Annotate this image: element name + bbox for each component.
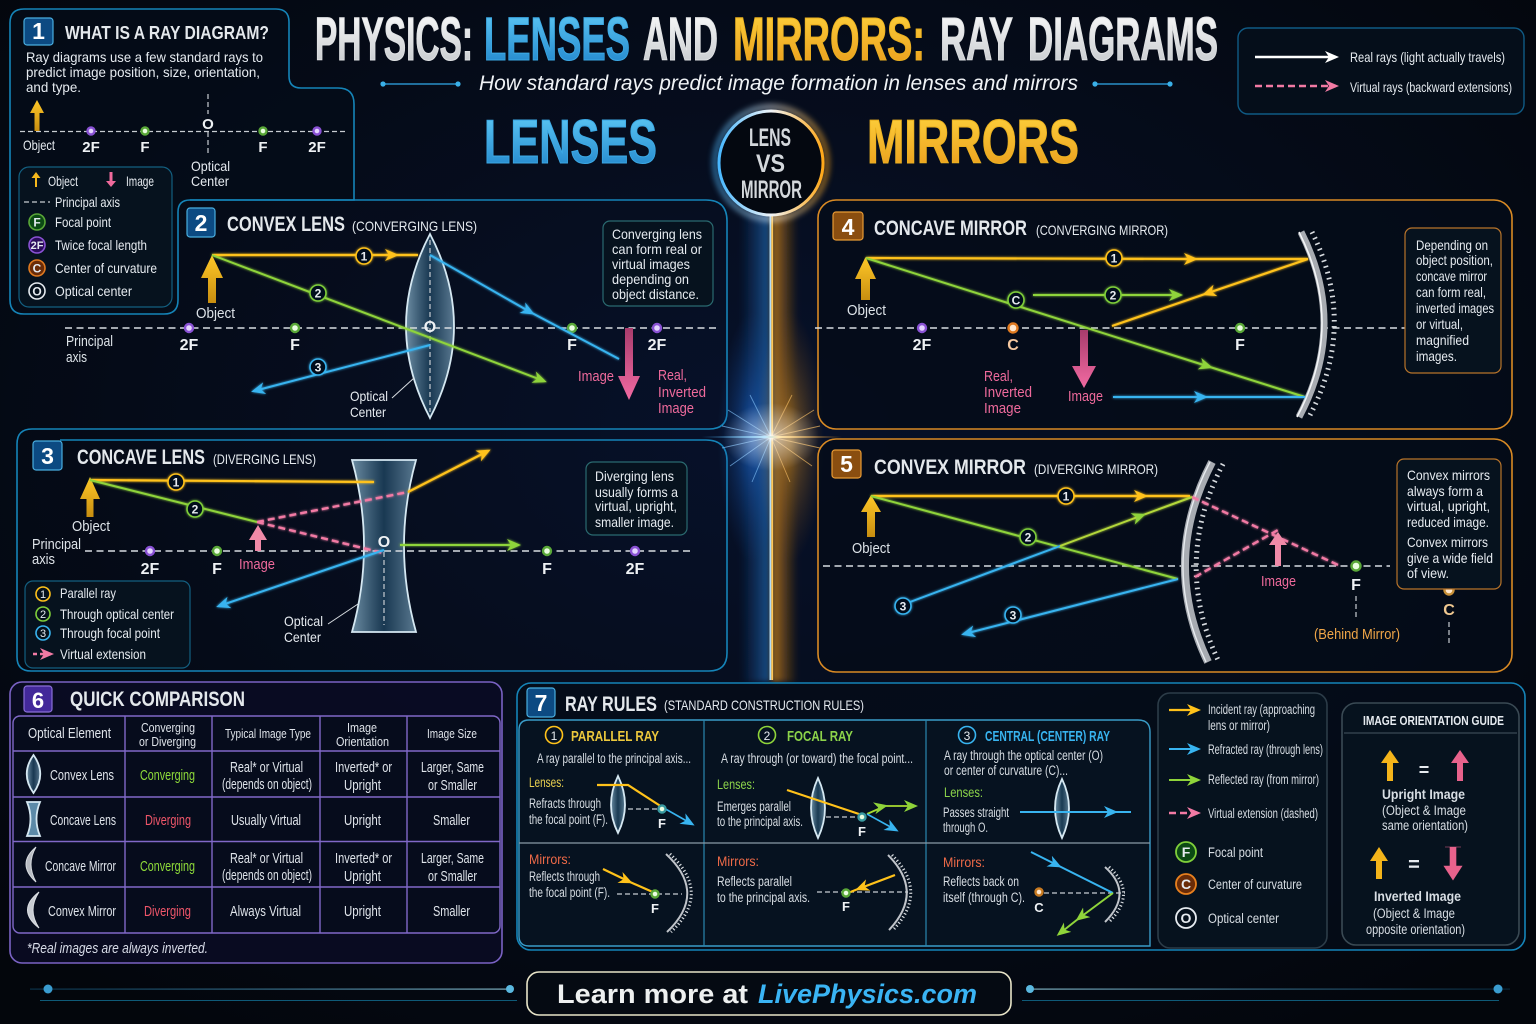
rays: 2 — [1110, 288, 1117, 302]
row: convex mirror: Smaller — [433, 904, 470, 920]
panel 5: convex mirror — [818, 439, 1512, 672]
principal axis and points: (Behind Mirror) — [1314, 626, 1400, 643]
row: convex lens: Real* or Virtual — [230, 760, 303, 776]
badge 3 — [33, 441, 62, 470]
rays: 3 — [315, 360, 322, 374]
rule 1: parallel ray: F — [651, 901, 659, 916]
rule 1: parallel ray: Lenses: — [529, 775, 564, 790]
image orientation guide: (Object & Image — [1373, 906, 1455, 921]
object arrow: Object — [847, 302, 887, 319]
ray and point legend: F — [1182, 844, 1191, 860]
table header row: Image — [347, 720, 377, 735]
row: concave lens: Usually Virtual — [231, 813, 301, 829]
rule 1: parallel ray: Refracts through — [529, 796, 601, 811]
panel 2 heading: CONVEX LENS — [227, 213, 345, 236]
ray and point legend: Focal point — [1208, 845, 1263, 860]
ray and point legend: C — [1181, 876, 1191, 892]
table header row — [28, 720, 477, 749]
image arrow — [1261, 532, 1296, 590]
rule 2: focal ray: F — [858, 824, 866, 839]
rays: 3 — [900, 600, 907, 614]
rule 3: central ray: Reflects back on — [943, 874, 1019, 889]
principal axis and focal points: 2F — [648, 337, 667, 354]
badge 6: 6 — [32, 688, 44, 713]
principal axis and points: 2F — [913, 337, 932, 354]
principal axis and focal points: F — [290, 337, 300, 354]
panel 2: convex lens — [17, 200, 727, 444]
badge 7: 7 — [535, 690, 547, 716]
note: converging lens: depending on — [612, 271, 689, 287]
note: diverging lens — [586, 462, 687, 535]
image arrow: Inverted — [984, 384, 1032, 401]
badge 7 — [527, 688, 555, 717]
image orientation guide: same orientation) — [1382, 818, 1468, 833]
ray and point legend: Reflected ray (from mirror) — [1208, 772, 1319, 787]
title: DIAGRAMS — [1028, 5, 1218, 73]
panel 3 heading: (DIVERGING LENS) — [213, 451, 316, 467]
note: diverging lens: usually forms a — [595, 484, 678, 500]
badge 2 — [187, 208, 215, 237]
object arrow: Object — [196, 305, 236, 322]
rule 3: central ray: itself (through C). — [943, 890, 1025, 905]
note: diverging lens: Diverging lens — [595, 468, 674, 484]
note: concave mirror: concave mirror — [1416, 268, 1487, 284]
image arrow — [984, 330, 1103, 417]
table header row: Image Size — [427, 726, 477, 741]
image arrow: Image — [1068, 388, 1103, 405]
intro axis diagram: F — [258, 139, 268, 156]
image arrow — [578, 328, 706, 417]
title: MIRRORS: — [733, 5, 925, 73]
heading: lenses: LENSES — [484, 108, 657, 177]
panel 1 description: Ray diagrams use a few standard rays to — [26, 49, 263, 65]
row: convex lens: Inverted* or — [335, 760, 392, 776]
badge 4 — [833, 212, 863, 240]
note: diverging lens: virtual, upright, — [595, 498, 677, 514]
row: concave lens: Diverging — [145, 813, 191, 829]
panel 3 heading: CONCAVE LENS — [77, 446, 205, 469]
panel 4 heading: (CONVERGING MIRROR) — [1036, 222, 1168, 238]
ray legend: 2 — [40, 609, 46, 621]
row: convex lens: (depends on object) — [222, 777, 312, 793]
symbol legend: F — [33, 216, 41, 230]
row: convex mirror: Convex Mirror — [48, 904, 116, 920]
note: converging lens: object distance. — [612, 286, 699, 302]
note: concave mirror: object position, — [1416, 252, 1493, 268]
principal axis and focal points: axis — [32, 551, 55, 568]
row: convex lens — [27, 755, 484, 794]
panel 1 description — [26, 49, 263, 95]
convex lens shape — [406, 234, 454, 418]
symbol legend: Optical center — [55, 283, 132, 299]
principal axis and focal points: axis — [66, 349, 87, 366]
badge 2: 2 — [195, 210, 207, 236]
ray legend: 3 — [40, 628, 46, 640]
ray and point legend: Virtual extension (dashed) — [1208, 806, 1318, 821]
rule 2: focal ray: to the principal axis. — [717, 814, 803, 829]
ray and point legend: Optical center — [1208, 911, 1279, 926]
row: concave mirror: Converging — [140, 859, 195, 875]
panel 3: concave lens — [17, 440, 727, 671]
footer: learn more link — [30, 972, 1510, 1015]
row: concave lens: Concave Lens — [50, 813, 116, 829]
ray legend: Through focal point — [60, 625, 160, 641]
badge 5 — [832, 450, 861, 478]
image orientation guide — [1342, 703, 1519, 945]
panel 4 heading — [874, 217, 1168, 240]
object arrow: Object — [852, 540, 891, 557]
rules grid — [519, 720, 1150, 946]
rule 3: central ray: 3 — [964, 729, 971, 743]
footer: learn more link: Learn more at — [557, 979, 748, 1009]
comparison table grid — [13, 716, 500, 933]
principal axis and focal points: Principal — [66, 333, 113, 350]
panel 4: concave mirror — [815, 200, 1512, 429]
rule 1: parallel ray: Mirrors: — [529, 852, 571, 867]
image orientation guide: = — [1419, 760, 1429, 780]
note: converging lens — [603, 221, 713, 306]
badge: lens vs mirror: MIRROR — [741, 176, 802, 204]
convex mirror shape — [1183, 462, 1223, 662]
title: LENSES — [484, 5, 630, 73]
row: convex lens: Converging — [140, 768, 195, 784]
symbol legend: Principal axis — [55, 194, 120, 210]
panel 5 heading: (DIVERGING MIRROR) — [1034, 461, 1158, 477]
rule 3: central ray: Mirrors: — [943, 855, 985, 870]
table footnote: *Real images are always inverted. — [27, 940, 208, 957]
note: convex mirror: Convex mirrors — [1407, 467, 1490, 483]
note: diverging lens: smaller image. — [595, 514, 674, 530]
rule 2: focal ray: 2 — [764, 729, 771, 743]
rays: 2 — [192, 502, 199, 516]
rule 3: central ray: Passes straight — [943, 805, 1009, 820]
panel 4 heading: CONCAVE MIRROR — [874, 217, 1027, 240]
note: convex mirror — [1397, 459, 1501, 589]
concave mirror shape — [1297, 232, 1334, 417]
row: convex lens: Convex Lens — [50, 768, 114, 784]
badge 1 — [24, 18, 53, 45]
row: concave mirror: Real* or Virtual — [230, 851, 303, 867]
rule 2: focal ray: Reflects parallel — [717, 874, 792, 889]
principal axis and focal points: F — [542, 561, 552, 578]
principal axis and points: F — [1351, 577, 1361, 594]
symbol legend: 2F — [31, 240, 44, 252]
rule 2: focal ray: Emerges parallel — [717, 799, 791, 814]
principal axis and focal points: F — [567, 337, 577, 354]
image arrow: Image — [239, 556, 275, 573]
principal axis and focal points: 2F — [180, 337, 199, 354]
rays: 1 — [361, 250, 368, 264]
rule 3: central ray: Lenses: — [944, 785, 983, 800]
note: convex mirror: give a wide field — [1407, 550, 1493, 566]
panel 5 heading: CONVEX MIRROR — [874, 456, 1026, 479]
rays — [871, 488, 1338, 634]
row: convex lens: Upright — [344, 778, 381, 794]
panel 2 heading: (CONVERGING LENS) — [352, 218, 477, 234]
optical center label — [350, 378, 414, 420]
note: converging lens: can form real or — [612, 241, 702, 257]
intro axis diagram: Object — [23, 137, 55, 153]
row: convex mirror — [28, 892, 470, 928]
rule 2: focal ray: FOCAL RAY — [787, 728, 853, 745]
row: convex lens: or Smaller — [428, 778, 477, 794]
symbol legend: O — [32, 284, 42, 298]
image orientation guide: Inverted Image — [1374, 888, 1461, 904]
panel 6: quick comparison — [10, 682, 502, 963]
intro axis diagram: 2F — [82, 139, 100, 156]
intro axis diagram: 2F — [308, 139, 326, 156]
note: concave mirror — [1405, 228, 1501, 373]
ray legend: Parallel ray — [60, 585, 116, 601]
note: concave mirror: magnified — [1416, 332, 1469, 348]
rays: C — [1012, 294, 1021, 308]
rule 2: focal ray: to the principal axis. — [717, 890, 810, 905]
badge 4: 4 — [842, 214, 855, 240]
note: converging lens: Converging lens — [612, 226, 702, 242]
symbol legend: Center of curvature — [55, 260, 157, 276]
optical center label: Optical — [350, 388, 388, 404]
rule 1: parallel ray: the focal point (F). — [529, 885, 610, 900]
badge: lens vs mirror — [715, 107, 827, 219]
badge 5: 5 — [840, 451, 853, 477]
rule 3: central ray: or center of curvature (C)... — [944, 763, 1068, 778]
table header row: or Diverging — [139, 734, 196, 749]
principal axis and points: F — [1235, 337, 1245, 354]
optical center label: Center — [350, 404, 386, 420]
optical center label: Optical — [284, 613, 323, 629]
title: RAY — [940, 5, 1013, 73]
rays: 1 — [173, 476, 180, 490]
ray legend: 1 — [40, 589, 46, 601]
rule 3: central ray: CENTRAL (CENTER) RAY — [985, 728, 1110, 745]
row: concave mirror — [26, 847, 484, 885]
panel 7 heading — [565, 693, 864, 716]
image arrow: Real, — [658, 367, 687, 384]
image arrow: Image — [578, 368, 614, 385]
rule 2: focal ray: Mirrors: — [717, 854, 759, 869]
row: concave mirror: Inverted* or — [335, 851, 392, 867]
badge 6 — [24, 686, 52, 713]
heading: mirrors: MIRRORS — [867, 108, 1079, 177]
rays: 2 — [1025, 530, 1032, 544]
principal axis and focal points: Principal — [32, 536, 81, 553]
image arrow: Inverted — [658, 384, 706, 401]
note: concave mirror: Depending on — [1416, 237, 1488, 253]
rays — [90, 451, 518, 606]
ray legend: Virtual extension — [60, 646, 146, 662]
ray and point legend: Refracted ray (through lens) — [1208, 742, 1323, 757]
ray and point legend: Incident ray (approaching — [1208, 702, 1315, 717]
symbol legend — [19, 167, 172, 307]
row: convex mirror: Diverging — [144, 904, 191, 920]
note: convex mirror: Convex mirrors — [1407, 534, 1488, 550]
image orientation guide: Upright Image — [1382, 786, 1465, 802]
symbol legend: C — [33, 262, 42, 276]
row: concave mirror: Concave Mirror — [45, 859, 116, 875]
principal axis and points — [823, 562, 1455, 645]
principal axis and points: C — [1007, 337, 1019, 354]
rays: 1 — [1063, 490, 1070, 504]
note: converging lens: virtual images — [612, 256, 690, 272]
image orientation guide: = — [1408, 854, 1420, 876]
row: convex lens: Larger, Same — [421, 760, 484, 776]
row: convex mirror: Upright — [344, 904, 381, 920]
panel 1 description: and type. — [26, 79, 81, 95]
panel 3 heading — [77, 446, 316, 469]
panel 6 heading: QUICK COMPARISON — [70, 688, 245, 711]
principal axis and focal points: 2F — [141, 561, 160, 578]
rule 2: focal ray: F — [842, 899, 850, 914]
panel 5 heading — [874, 456, 1158, 479]
principal axis and focal points: 2F — [626, 561, 645, 578]
badge 1: 1 — [32, 18, 45, 44]
image orientation guide: opposite orientation) — [1366, 922, 1465, 937]
table header row: Converging — [141, 720, 195, 735]
row: concave mirror: or Smaller — [428, 869, 477, 885]
ray and point legend: Center of curvature — [1208, 877, 1302, 892]
principal axis and focal points: F — [212, 561, 222, 578]
footer: learn more link: LivePhysics.com — [758, 979, 977, 1009]
table header row: Orientation — [336, 734, 389, 749]
panel 2 heading — [227, 213, 477, 236]
image arrow: Image — [658, 400, 694, 417]
principal axis and focal points — [65, 240, 720, 412]
rays — [866, 250, 1308, 397]
rule 3: central ray: A ray through the optical center (O) — [944, 748, 1103, 763]
title: AND — [643, 5, 718, 73]
object arrow: Object — [72, 518, 111, 535]
ray legend: Through optical center — [60, 606, 174, 622]
rule 2: focal ray: Lenses: — [717, 777, 755, 792]
rays: 2 — [315, 286, 322, 300]
ray legend — [25, 581, 190, 668]
rays: 3 — [1010, 608, 1017, 622]
row: concave lens: Upright — [344, 813, 381, 829]
image arrow — [239, 525, 275, 573]
panel 1: what is a ray diagram — [10, 9, 354, 314]
central beam divider — [702, 212, 842, 682]
title — [315, 5, 1218, 73]
intro axis diagram — [20, 94, 348, 189]
principal axis and focal points — [32, 536, 690, 625]
optical center mark: O — [424, 319, 436, 336]
rule 3: central ray — [943, 726, 1131, 934]
concave lens shape — [352, 460, 416, 632]
object arrow — [196, 255, 236, 322]
intro axis diagram: F — [140, 139, 150, 156]
symbol legend: Twice focal length — [55, 237, 147, 253]
ray and point legend: O — [1181, 910, 1192, 926]
note: convex mirror: reduced image. — [1407, 514, 1489, 530]
principal axis and points — [815, 324, 1405, 354]
rule 1: parallel ray: PARALLEL RAY — [571, 728, 659, 745]
image arrow: Image — [984, 400, 1021, 417]
rule 2: focal ray: A ray through (or toward) the focal point... — [721, 751, 913, 766]
rule 3: central ray: C — [1034, 900, 1044, 915]
ray and point legend: lens or mirror) — [1208, 718, 1270, 733]
image arrow: Real, — [984, 368, 1013, 385]
rule 1: parallel ray: A ray parallel to the principal axis... — [537, 751, 691, 766]
badge 3: 3 — [41, 443, 54, 469]
row: concave lens — [27, 802, 470, 836]
note: concave mirror: can form real, — [1416, 284, 1486, 300]
row: concave lens: Smaller — [433, 813, 470, 829]
panel 1 heading: WHAT IS A RAY DIAGRAM? — [65, 23, 269, 43]
rule 1: parallel ray: the focal point (F). — [529, 812, 608, 827]
rule 1: parallel ray — [529, 726, 692, 932]
principal axis and points: C — [1443, 602, 1455, 619]
title: PHYSICS: — [315, 5, 473, 73]
row: concave mirror: Upright — [344, 869, 381, 885]
ray and point legend — [1158, 693, 1327, 948]
rule 1: parallel ray: 1 — [551, 729, 558, 743]
intro axis diagram: O — [202, 116, 214, 133]
object arrow — [852, 495, 891, 557]
table header row: Optical Element — [28, 726, 111, 742]
image orientation guide: (Object & Image — [1382, 803, 1466, 818]
symbol legend: Focal point — [55, 214, 111, 230]
object arrow — [72, 477, 111, 535]
rule 1: parallel ray: F — [658, 816, 666, 831]
note: convex mirror: always form a — [1407, 483, 1483, 499]
rays — [212, 248, 619, 391]
note: convex mirror: of view. — [1407, 565, 1449, 581]
table header row: Typical Image Type — [225, 726, 311, 741]
rays: 1 — [1111, 252, 1118, 266]
panel 7 heading: (STANDARD CONSTRUCTION RULES) — [664, 697, 864, 713]
badge: lens vs mirror: VS — [756, 150, 785, 178]
badge: lens vs mirror: LENS — [749, 124, 791, 152]
symbol legend: Object — [48, 173, 78, 189]
note: concave mirror: inverted images — [1416, 300, 1494, 316]
row: concave mirror: (depends on object) — [222, 868, 312, 884]
panel 7 heading: RAY RULES — [565, 693, 657, 716]
panel 1 description: predict image position, size, orientation, — [26, 64, 260, 80]
rule 3: central ray: through O. — [943, 820, 988, 835]
row: convex mirror: Always Virtual — [230, 904, 301, 920]
intro axis diagram: Center — [191, 173, 229, 189]
optical center label — [284, 604, 358, 645]
intro axis diagram: Optical — [191, 158, 230, 174]
symbol legend: Image — [126, 173, 154, 189]
object arrow — [847, 257, 887, 319]
subtitle: How standard rays predict image formation in lenses and mirrors — [479, 72, 1078, 95]
rule 1: parallel ray: Reflects through — [529, 869, 600, 884]
note: concave mirror: or virtual, — [1416, 316, 1463, 332]
optical center mark: O — [378, 534, 390, 551]
panel 7: ray rules — [517, 683, 1525, 950]
note: convex mirror: virtual, upright, — [1407, 498, 1490, 514]
note: concave mirror: images. — [1416, 348, 1457, 364]
rule 2: focal ray — [717, 726, 915, 930]
image arrow: Image — [1261, 573, 1296, 590]
legend: real and virtual rays — [1238, 28, 1524, 114]
row: concave mirror: Larger, Same — [421, 851, 484, 867]
optical center label: Center — [284, 629, 321, 645]
